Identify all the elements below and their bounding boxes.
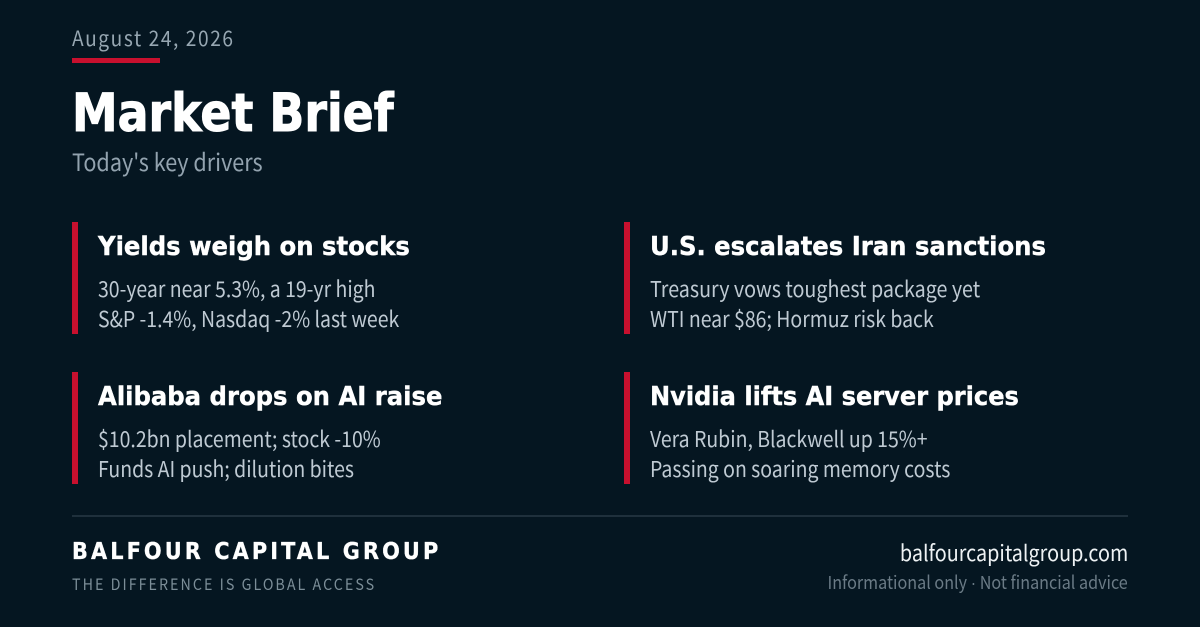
panel: alibaba bbox=[72, 372, 442, 484]
text: iran line 2: WTI near $86; Hormuz risk back bbox=[650, 302, 934, 334]
website: balfourcapitalgroup.com bbox=[900, 536, 1128, 568]
heading: alibaba: Alibaba drops on AI raise bbox=[98, 382, 442, 412]
text: alibaba line 2: Funds AI push; dilution bites bbox=[98, 452, 354, 484]
text: iran line 1: Treasury vows toughest package yet bbox=[650, 272, 980, 304]
brand name: BALFOUR CAPITAL GROUP bbox=[72, 539, 441, 565]
date: August 24, 2026 bbox=[72, 23, 235, 53]
tagline: THE DIFFERENCE IS GLOBAL ACCESS bbox=[72, 573, 376, 595]
accent rule bbox=[72, 58, 160, 63]
heading: iran: U.S. escalates Iran sanctions bbox=[650, 232, 1046, 262]
panel: yields bbox=[72, 222, 410, 334]
panel: iran bbox=[624, 222, 1046, 334]
text: alibaba line 1: $10.2bn placement; stock -10% bbox=[98, 422, 381, 454]
text: yields line 1: 30-year near 5.3%, a 19-yr high bbox=[98, 272, 375, 304]
subtitle: Today's key drivers bbox=[72, 143, 263, 178]
text: nvidia line 2: Passing on soaring memory costs bbox=[650, 452, 950, 484]
title: Market Brief bbox=[72, 83, 394, 144]
heading: nvidia: Nvidia lifts AI server prices bbox=[650, 382, 1019, 412]
panel: nvidia bbox=[624, 372, 1019, 484]
text: yields line 2: S&P -1.4%, Nasdaq -2% last week bbox=[98, 302, 399, 334]
disclaimer: Informational only · Not financial advice bbox=[828, 568, 1128, 594]
text: nvidia line 1: Vera Rubin, Blackwell up 15%+ bbox=[650, 422, 928, 454]
heading: yields: Yields weigh on stocks bbox=[98, 232, 410, 262]
